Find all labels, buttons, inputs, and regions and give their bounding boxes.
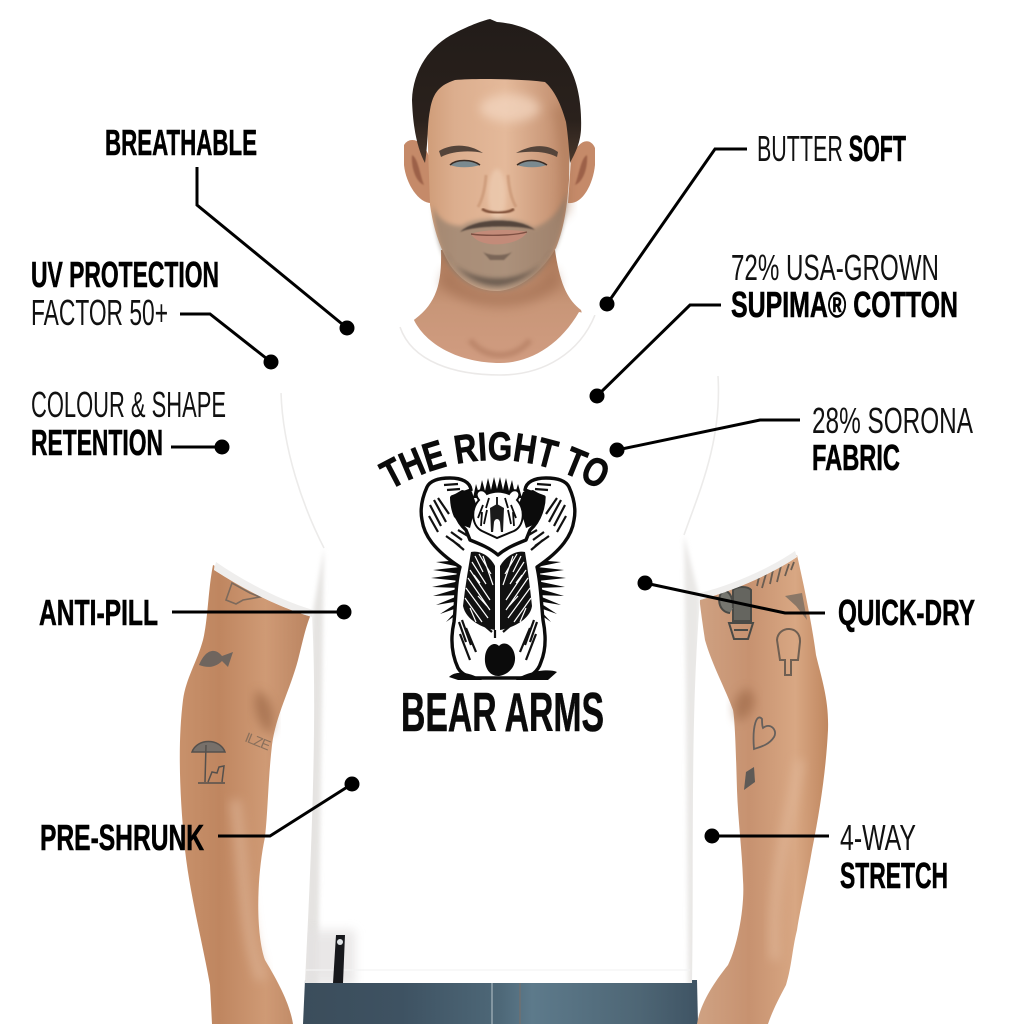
tattoo: butterfly: [785, 593, 807, 620]
chest and belly fur: [463, 552, 495, 630]
shirt shading: [303, 548, 324, 985]
model photo illustration: [180, 19, 828, 1024]
callout: colour and shape retention: [31, 384, 230, 463]
graphic text: bottom: BEAR ARMS: [401, 681, 604, 743]
callout: pre-shrunk: [40, 776, 360, 858]
callout: UV protection: FACTOR 50+: [31, 292, 168, 333]
nose: [482, 209, 514, 213]
bear outline: [421, 478, 575, 678]
tattoo: fish: [199, 651, 233, 667]
woven tag: [333, 935, 345, 983]
callout: UV protection: UV PROTECTION: [31, 254, 219, 295]
shirt graphic: The Right To Bear Arms: [377, 432, 608, 743]
callout: 4-way stretch: STRETCH: [840, 855, 948, 896]
jeans: [303, 980, 698, 1024]
t-shirt: [214, 312, 797, 985]
callout: supima cotton: [590, 247, 958, 404]
callout: anti-pill: ANTI-PILL: [39, 592, 158, 633]
cheek shade: [552, 100, 570, 225]
head: [473, 490, 523, 538]
stubble: [433, 190, 567, 291]
tail patch: [485, 643, 515, 676]
bear illustration: [421, 477, 575, 680]
tattoo: heart: [754, 717, 775, 749]
callout: colour and shape retention: RETENTION: [31, 422, 163, 463]
feet: [449, 670, 557, 680]
graphic text: arched: THE RIGHT TO: [377, 432, 608, 487]
mouth: [471, 230, 527, 244]
callout: 4-way stretch: [704, 817, 948, 896]
callout: quick-dry: [638, 576, 975, 633]
right arm: [697, 555, 828, 1024]
top spikes: [473, 477, 522, 498]
tattoo: lettering: ILZE: [243, 729, 273, 754]
side spikes: [431, 560, 466, 627]
callout: UV protection: [31, 254, 278, 370]
callout: pre-shrunk: PRE-SHRUNK: [40, 817, 204, 858]
arm fur: [429, 484, 566, 550]
tattoo: hand: [226, 583, 260, 604]
dark patches beside head: [450, 490, 476, 528]
ears: [404, 140, 595, 203]
tattoo: sun rays: [757, 562, 794, 588]
tattoo: small marks: [744, 767, 755, 790]
callout: colour and shape retention: COLOUR & SHAPE: [31, 384, 226, 425]
callout: butter soft: [600, 128, 906, 312]
face: [426, 68, 570, 291]
callout: sorona fabric: FABRIC: [812, 437, 900, 478]
tattoo: cactus: [719, 587, 753, 639]
callout: 4-way stretch: 4-WAY: [840, 817, 916, 858]
hair: [412, 19, 581, 163]
tattoo: popsicle: [777, 629, 800, 675]
callout: sorona fabric: [610, 400, 973, 478]
tag logo: [337, 939, 343, 945]
callout: butter soft: BUTTER SOFT: [757, 128, 906, 169]
callout: anti-pill: [39, 592, 352, 633]
neck: [408, 250, 590, 372]
eyes: [450, 160, 480, 167]
eyebrows: [439, 146, 483, 157]
callout: breathable: BREATHABLE: [105, 122, 257, 163]
legs fur: [459, 620, 537, 660]
callout: breathable: [105, 122, 354, 336]
left arm: [180, 565, 312, 1024]
tattoo: umbrella and chair: [192, 742, 225, 783]
